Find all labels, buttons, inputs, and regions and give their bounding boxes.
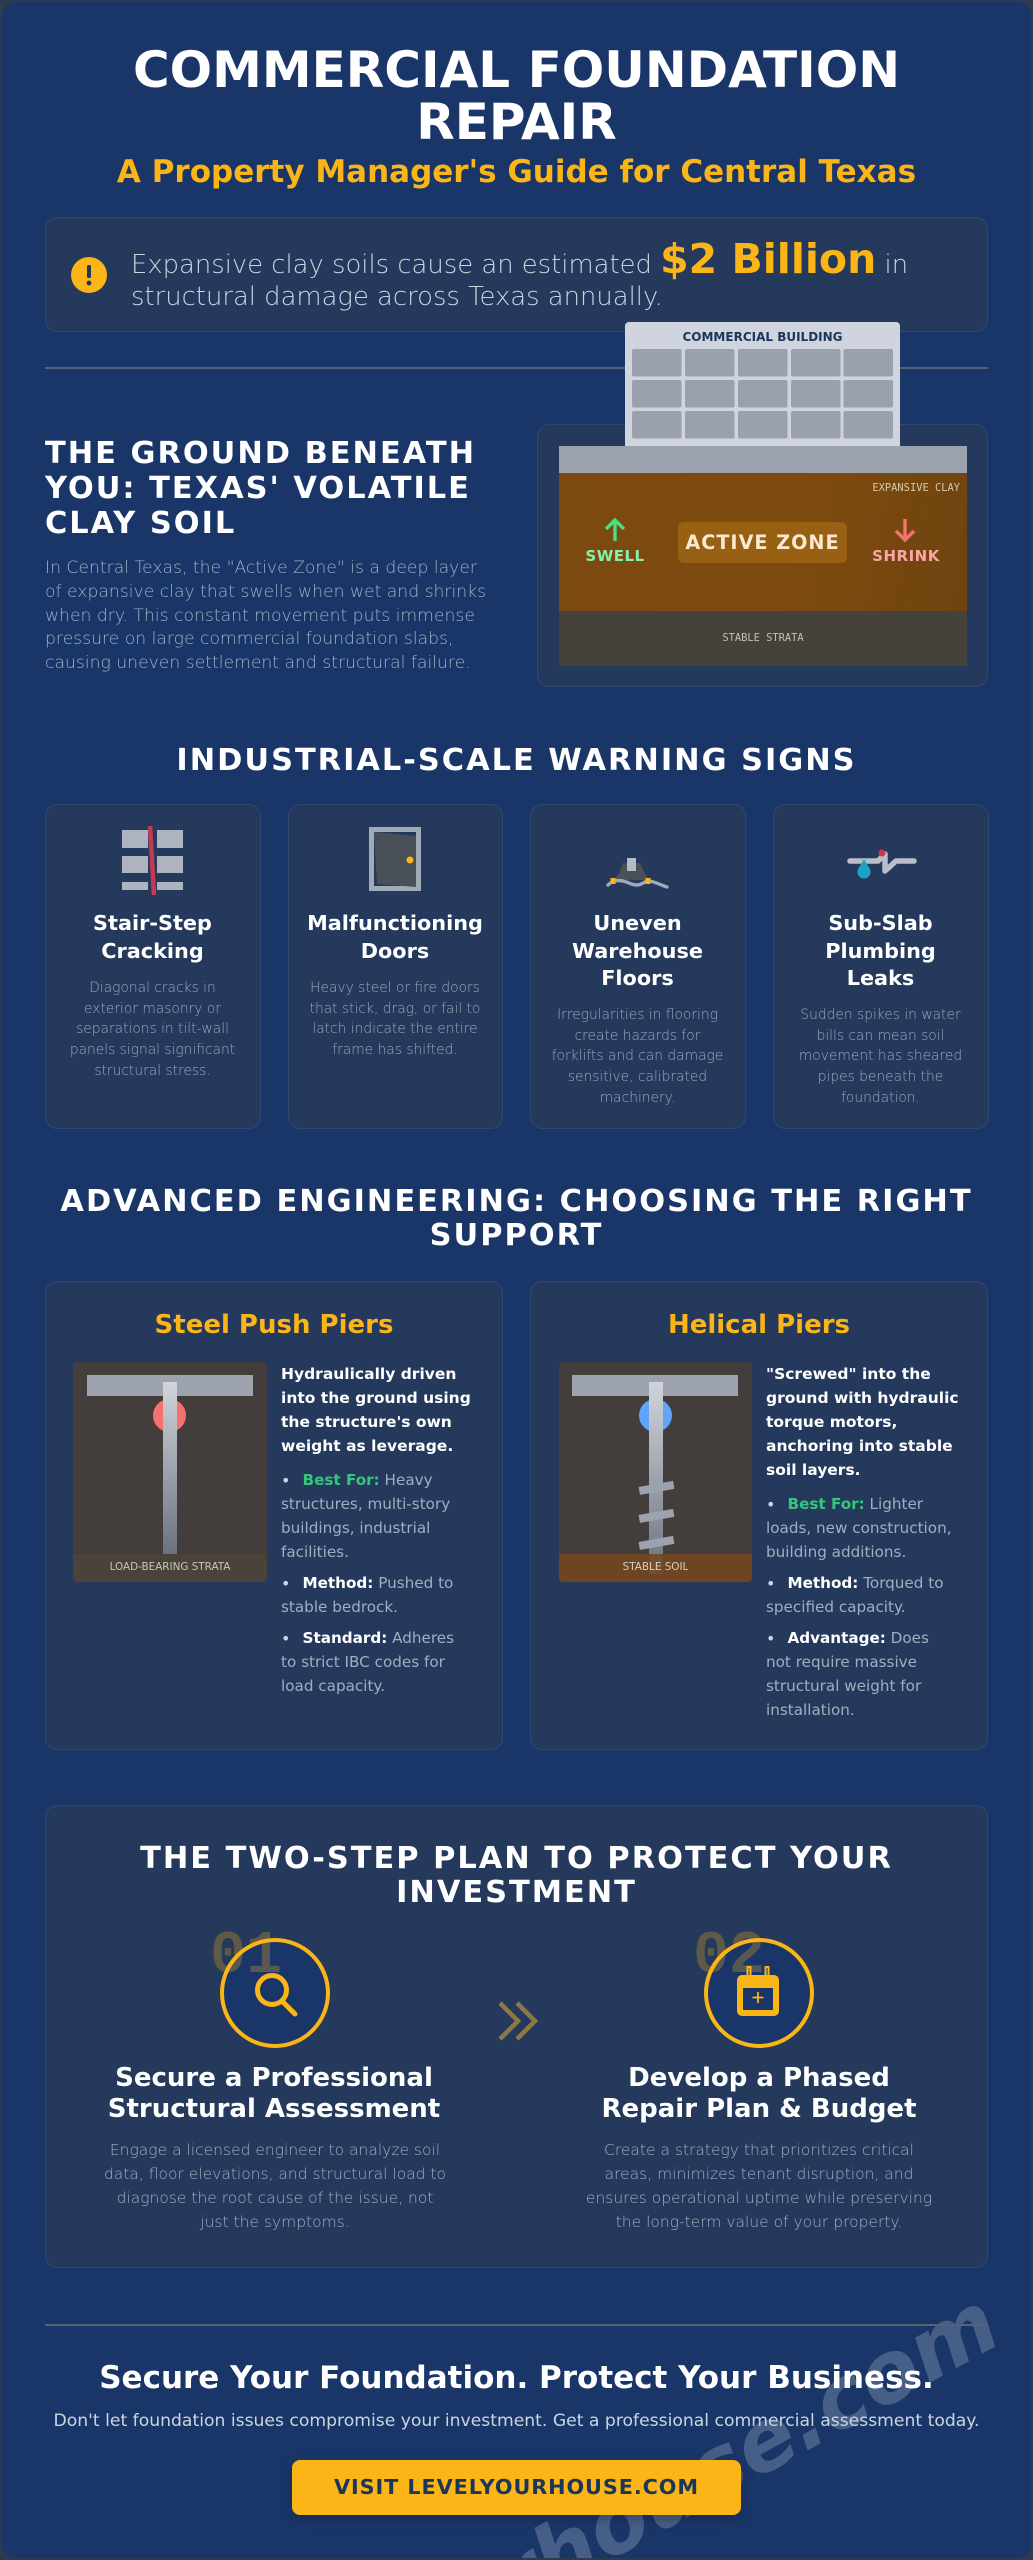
button xyxy=(292,2460,741,2515)
load-bearing strata: LOAD-BEARING STRATA xyxy=(110,1561,230,1573)
step 2 text: ensures operational uptime while preserving xyxy=(586,2189,932,2207)
lead text xyxy=(281,1365,471,1455)
card text: pipes beneath the xyxy=(818,1069,943,1085)
panel heading xyxy=(140,1841,893,1910)
clay label: EXPANSIVE CLAY xyxy=(872,482,960,494)
lead text: the structure's own xyxy=(281,1413,452,1431)
active zone label xyxy=(678,522,847,563)
icon: up arrow xyxy=(604,518,626,541)
torque indicator xyxy=(639,1399,672,1432)
heading: advanced engineering xyxy=(60,1184,973,1253)
step 2 text: areas, minimizes tenant disruption, and xyxy=(605,2165,913,2183)
card text: movement has sheared xyxy=(799,1048,962,1064)
panel: uneven warehouse floors xyxy=(530,804,746,1129)
heading: volatile clay soil xyxy=(44,436,476,541)
step 1 title xyxy=(108,2063,440,2124)
building label: COMMERCIAL BUILDING xyxy=(682,330,843,344)
card title xyxy=(825,911,936,990)
pier shaft xyxy=(649,1382,663,1574)
bullet: advantage xyxy=(766,1629,929,1719)
lead text: into the ground using xyxy=(281,1389,471,1407)
stable soil xyxy=(559,1554,752,1582)
card text: sensitive, calibrated xyxy=(568,1069,707,1085)
card text: panels signal significant xyxy=(70,1042,235,1058)
lead text: anchoring into stable xyxy=(766,1437,953,1455)
card title: Doors xyxy=(361,938,429,962)
body text: active zone xyxy=(45,558,486,673)
panel heading: THE TWO-STEP PLAN TO PROTECT YOUR xyxy=(140,1841,893,1876)
bullet: best for: structures, multi-story xyxy=(281,1495,450,1513)
divider xyxy=(45,2324,988,2326)
bullet: method xyxy=(281,1574,453,1616)
bullet: method: stable bedrock. xyxy=(281,1598,398,1616)
pier shaft xyxy=(163,1382,177,1554)
card title xyxy=(93,911,212,962)
step 1 text: data, floor elevations, and structural load to xyxy=(104,2165,446,2183)
bullet: best for: Best For: Heavy xyxy=(302,1471,433,1489)
shrink indicator xyxy=(872,519,940,565)
diagram: building and soil layers xyxy=(559,322,967,666)
divider xyxy=(45,367,988,369)
icon: door xyxy=(369,827,421,891)
beam xyxy=(87,1375,253,1396)
step 2 title: Develop a Phased xyxy=(628,2063,890,2093)
step 1 text xyxy=(104,2141,446,2231)
bullet: standard: to strict IBC codes for xyxy=(281,1653,445,1671)
bullet: method: Method: Pushed to xyxy=(302,1574,453,1592)
bullet: best for xyxy=(766,1495,952,1561)
body text: active zone: pressure on large commercial foundation slabs, xyxy=(45,629,453,649)
bullet: standard: • xyxy=(281,1629,290,1648)
panel: stair-step cracking xyxy=(45,804,260,1129)
card text: Sudden spikes in water xyxy=(800,1007,961,1023)
card title: Malfunctioning xyxy=(307,911,483,935)
alert text xyxy=(131,235,908,312)
heading: volatile clay soil: YOU: TEXAS' VOLATILE xyxy=(45,471,471,506)
alert text: structural damage across Texas annually. xyxy=(131,282,663,312)
lead text: weight as leverage. xyxy=(281,1437,453,1455)
card text xyxy=(552,1007,723,1106)
card text: Heavy steel or fire doors xyxy=(310,980,480,996)
bullet: best for: • xyxy=(281,1471,290,1490)
load-bearing strata xyxy=(73,1554,267,1582)
lead text xyxy=(766,1365,959,1479)
bullet: method: specified capacity. xyxy=(766,1598,906,1616)
panel: statistic alert xyxy=(45,217,988,332)
card title: Plumbing xyxy=(825,938,936,962)
card text: bills can mean soil xyxy=(817,1028,944,1044)
subtitle: A Property Manager's Guide for Central Texas xyxy=(117,154,916,190)
card title: Leaks xyxy=(847,966,914,990)
helix plates xyxy=(638,1480,674,1550)
card title: Uneven xyxy=(593,911,682,935)
building xyxy=(625,322,900,446)
step 1 title: Secure a Professional xyxy=(115,2063,433,2093)
bullet: method xyxy=(766,1574,944,1616)
step 2 text: the long-term value of your property. xyxy=(616,2213,902,2231)
card text: frame has shifted. xyxy=(332,1042,458,1058)
call to action heading: Secure Your Foundation. Protect Your Business. xyxy=(99,2360,934,2396)
icon: calendar in circle xyxy=(704,1938,814,2048)
diagram: helical pier xyxy=(559,1362,752,1582)
icon: exclamation xyxy=(71,257,107,293)
panel: steel push piers xyxy=(45,1281,503,1750)
bullet: best for: facilities. xyxy=(281,1543,349,1561)
lead text: soil layers. xyxy=(766,1461,861,1479)
card title xyxy=(572,911,703,990)
stable soil: STABLE SOIL xyxy=(623,1561,688,1573)
building windows xyxy=(632,349,893,438)
bullet: standard xyxy=(281,1629,454,1695)
card text: forklifts and can damage xyxy=(552,1048,723,1064)
panel: soil diagram xyxy=(537,424,988,687)
step 2 title: Repair Plan & Budget xyxy=(601,2094,916,2124)
heading: advanced engineering: ADVANCED ENGINEERING: CHOOSING THE RIGHT xyxy=(60,1184,973,1219)
button: VISIT LEVELYOURHOUSE.COM xyxy=(334,2475,699,2499)
bullet: standard: load capacity. xyxy=(281,1677,385,1695)
title: COMMERCIAL FOUNDATION xyxy=(133,41,900,99)
step 1 number: 01 xyxy=(210,1923,282,1991)
card title: Cracking xyxy=(101,938,204,962)
card title: Warehouse xyxy=(572,938,703,962)
slab xyxy=(559,446,967,473)
bullet: method: Method: Torqued to xyxy=(788,1574,944,1592)
heading: warning signs: INDUSTRIAL-SCALE WARNING SIGNS xyxy=(176,743,857,778)
lead text: ground with hydraulic xyxy=(766,1389,959,1407)
panel heading: INVESTMENT xyxy=(396,1875,637,1910)
expansive clay layer xyxy=(559,473,967,611)
card title xyxy=(307,911,483,962)
panel: two-step plan xyxy=(45,1805,988,2268)
step 2 title xyxy=(601,2063,916,2124)
card text: separations in tilt-wall xyxy=(76,1021,229,1037)
body text: active zone: In Central Texas, the "Active Zone" is a deep layer xyxy=(45,558,477,578)
swell label: SWELL xyxy=(585,547,645,565)
body text: active zone: of expansive clay that swells when wet and shrinks xyxy=(45,582,486,602)
icon: double chevron arrow xyxy=(498,2002,538,2040)
card text xyxy=(799,1007,962,1106)
title: REPAIR xyxy=(416,93,617,151)
panel: helical piers xyxy=(530,1281,988,1750)
heading: volatile clay soil: CLAY SOIL xyxy=(45,506,236,541)
call to action text: Don't let foundation issues compromise your investment. Get a professional commercial assessment today. xyxy=(54,2411,979,2431)
icon: down arrow xyxy=(894,519,916,542)
card text: latch indicate the entire xyxy=(312,1021,478,1037)
card text: structural stress. xyxy=(94,1063,211,1079)
bullet: advantage: not require massive xyxy=(766,1653,917,1671)
title xyxy=(133,41,900,151)
card text: create hazards for xyxy=(575,1028,700,1044)
card heading: Steel Push Piers xyxy=(155,1310,393,1340)
icon: cracked bricks xyxy=(122,826,183,896)
card title: Sub-Slab xyxy=(828,911,933,935)
step 2 text xyxy=(531,2138,987,2234)
bullet: best for: loads, new construction, xyxy=(766,1519,952,1537)
body text: active zone: when dry. This constant movement puts immense xyxy=(45,606,475,626)
step 1 title: Structural Assessment xyxy=(108,2094,440,2124)
bullet: advantage: • xyxy=(766,1629,775,1648)
heading: advanced engineering: SUPPORT xyxy=(430,1218,603,1253)
bullet: advantage: Advantage: Does xyxy=(788,1629,929,1647)
body text: active zone: causing uneven settlement and structural failure. xyxy=(45,653,471,673)
active zone label: ACTIVE ZONE xyxy=(685,531,840,554)
card text: foundation. xyxy=(841,1090,920,1106)
card text xyxy=(310,980,480,1058)
bullet: best for: • xyxy=(766,1495,775,1514)
icon: forklift on uneven floor xyxy=(606,858,669,889)
shrink label: SHRINK xyxy=(872,547,940,565)
bullet: advantage: installation. xyxy=(766,1701,855,1719)
card text: Irregularities in flooring xyxy=(557,1007,718,1023)
card text: that stick, drag, or fail to xyxy=(310,1001,480,1017)
panel: malfunctioning doors xyxy=(288,804,503,1129)
icon: magnifier in circle xyxy=(220,1938,330,2048)
stable strata layer xyxy=(559,611,967,666)
card title: Stair-Step xyxy=(93,911,212,935)
card text: Diagonal cracks in xyxy=(89,980,216,996)
beam xyxy=(572,1375,738,1396)
bullet: method: • xyxy=(281,1574,290,1593)
bullet: best for: buildings, industrial xyxy=(281,1519,430,1537)
diagram: push pier xyxy=(73,1362,267,1582)
bullet: best for xyxy=(281,1471,450,1561)
stable strata layer: STABLE STRATA xyxy=(722,632,804,644)
hydraulic indicator xyxy=(153,1399,186,1432)
card text: exterior masonry or xyxy=(84,1001,221,1017)
card text xyxy=(70,980,235,1079)
heading: volatile clay soil: THE GROUND BENEATH xyxy=(45,436,476,471)
step 1 text: just the symptoms. xyxy=(200,2213,350,2231)
alert text: Expansive clay soils cause an estimated $2 Billion in xyxy=(131,235,908,283)
bullet: standard: Standard: Adheres xyxy=(302,1629,454,1647)
card title: Floors xyxy=(601,966,674,990)
step 2 text: Create a strategy that prioritizes critical xyxy=(604,2141,914,2159)
bullet: advantage: structural weight for xyxy=(766,1677,921,1695)
step 1 text: diagnose the root cause of the issue, not xyxy=(117,2189,433,2207)
lead text: "Screwed" into the xyxy=(766,1365,931,1383)
bullet: best for: building additions. xyxy=(766,1543,906,1561)
bullet: best for: Best For: Lighter xyxy=(788,1495,923,1513)
step 1 text: Engage a licensed engineer to analyze soil xyxy=(110,2141,440,2159)
icon: leaking pipe xyxy=(847,850,917,878)
swell indicator xyxy=(585,518,645,565)
card text: machinery. xyxy=(600,1090,675,1106)
bullet: method: • xyxy=(766,1574,775,1593)
card heading: Helical Piers xyxy=(668,1310,850,1340)
lead text: Hydraulically driven xyxy=(281,1365,456,1383)
step 2 number: 02 xyxy=(693,1923,765,1991)
lead text: torque motors, xyxy=(766,1413,897,1431)
panel: sub-slab plumbing leaks xyxy=(773,804,988,1129)
